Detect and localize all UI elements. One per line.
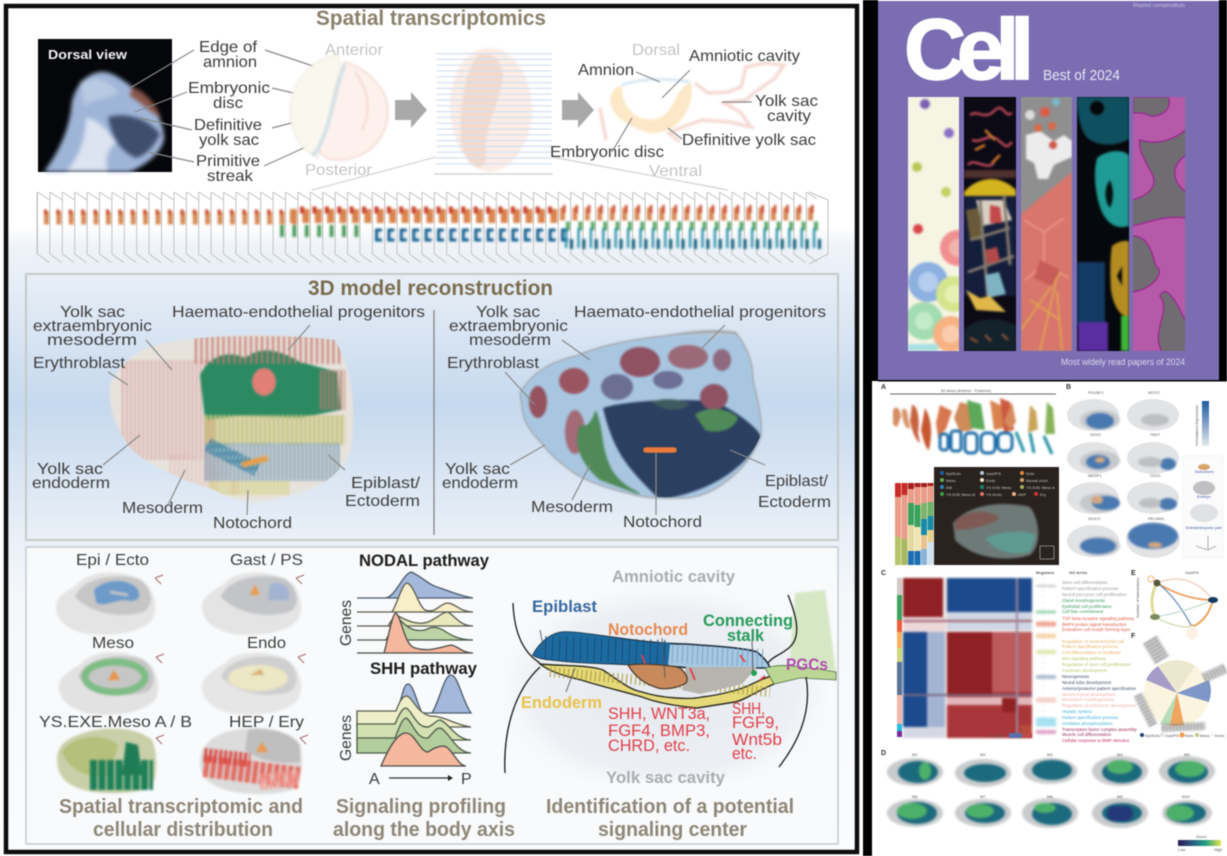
chart: SHH pathway ridgeline: SHH pathway: [370, 660, 478, 678]
diagram: potential signaling center: FGF4, BMP3,: [608, 722, 710, 740]
GO terms list: Oxidative phosphorylation: [1062, 721, 1113, 726]
labels: rendered surface: Mesoderm: [531, 499, 613, 516]
labels: rendered surface: extraembryonic: [449, 318, 568, 335]
diagram: potential signaling center: Endoderm: [521, 694, 602, 712]
cover text: Most widely read papers of 2024: [1061, 357, 1185, 367]
figure panel A: sections, bars and cloud: Noto: [1026, 471, 1035, 476]
embryo labels: amnion: [203, 54, 257, 71]
divider: [433, 310, 435, 535]
GO terms list: [1062, 580, 1138, 743]
diagram: potential signaling center: Wnt5b: [732, 731, 782, 749]
diagram: potential signaling center: stalk: [727, 627, 765, 645]
GO terms list: Mesoderm morphogenesis: [1062, 697, 1115, 702]
figure panel A: sections, bars and cloud: [881, 384, 1059, 565]
arrow: [562, 92, 594, 128]
regulon tick labels: [1036, 578, 1056, 738]
figure panel B: gene expression maps: [1066, 384, 1223, 558]
chart: SHH pathway ridgeline: Genes: [338, 715, 355, 761]
heading: signaling profiling along the body axis: Signaling profiling: [336, 796, 506, 818]
figure panel D: module score maps: M3: [1047, 752, 1053, 757]
labels: spot cloud: Notochord: [213, 515, 292, 532]
figure panel A: sections, bars and cloud: Ery: [1040, 492, 1046, 497]
figure panel A: sections, bars and cloud: YS EXE Meso: [986, 485, 1012, 490]
diagram: embryo sketch with orientation: [290, 42, 388, 179]
map: Endo: [202, 635, 306, 715]
heatmap module colour stripe: [897, 578, 902, 737]
figure panel C: regulon correlation heatmap: [881, 570, 1138, 743]
figure panel D: module score maps: M10: [1182, 794, 1191, 799]
map: Meso: Meso: [92, 635, 134, 652]
diagram: embryo cross section: Definitive yolk sac: [682, 132, 816, 149]
diagram: potential signaling center: Epiblast: [532, 598, 598, 616]
figure panel D: module score maps: M7: [980, 794, 986, 799]
labels: spot cloud: Erythroblast: [33, 355, 126, 372]
chart: NODAL pathway ridgeline: Genes: [338, 600, 355, 646]
GO terms list: Cell fate commitment: [1062, 609, 1104, 614]
heading: spatial transcriptomics: Spatial transcriptomics: [316, 7, 546, 30]
cover text: [904, 2, 1185, 367]
chart: SHH pathway ridgeline: [338, 660, 478, 788]
labels: spot cloud: Mesoderm: [122, 500, 203, 517]
labels: rendered surface: Epiblast/: [765, 473, 829, 490]
figure panel A: sections, bars and cloud: HEP: [1018, 492, 1027, 497]
figure panel D: module score maps: High: [1214, 847, 1222, 852]
panel: signalling analyses: [26, 547, 838, 844]
diagram: potential signaling center: PGCs: [786, 656, 828, 674]
labels: spot cloud: Ectoderm: [345, 493, 420, 510]
embryo labels: yolk sac: [199, 132, 259, 149]
embryo labels: [188, 39, 270, 185]
labels: spot cloud: Haemato-endothelial progenitors: [172, 304, 425, 321]
heatmap cell blocks: [903, 578, 1032, 738]
figure panel B: gene expression maps: SOX2: [1090, 432, 1101, 437]
diagram: potential signaling center: Connecting: [703, 612, 793, 630]
figure panel A: sections, bars and cloud: YS Endo: [986, 492, 1003, 497]
labels: rendered surface: Haemato-endothelial progenitors: [574, 304, 826, 321]
figure panel A: sections, bars and cloud: YS EXE Meso A: [1026, 485, 1055, 490]
diagram: sectioning stack: [434, 48, 553, 174]
map: Epi / Ecto: [56, 552, 163, 635]
map: YS.EXE.Meso A / B: [39, 714, 192, 793]
GO terms list: Transcription factor complex assembly: [1062, 727, 1138, 732]
GO terms list: Regulation of stem cell proliferation: [1062, 662, 1131, 667]
main figure frame: [6, 6, 857, 852]
photo: dorsal view of embryo: Dorsal view: [48, 48, 127, 62]
figure panel D: module score maps: [881, 750, 1222, 852]
figure panel A: sections, bars and cloud: 50 slices (Anterior - Posterior): [941, 388, 992, 393]
figure panel D: module score maps: M8: [1047, 794, 1053, 799]
figure panel B: gene expression maps: Embryo: [1197, 494, 1212, 499]
labels: spot cloud: mesoderm: [47, 332, 137, 349]
diagram: embryo sketch with orientation: Anterior: [325, 42, 384, 59]
leader lines from labels: [130, 50, 358, 166]
figure panel B: gene expression maps: NOTO: [1148, 390, 1159, 395]
figure panel D: module score maps: Score: [1196, 834, 1207, 839]
cover text: Best of 2024: [1043, 68, 1120, 84]
figure panel B: gene expression maps: B: [1066, 384, 1071, 391]
diagram: potential signaling center: Amniotic cavity: [612, 568, 736, 586]
figure panel F: chord diagram: Meso: [1200, 733, 1211, 738]
embryo labels: Definitive: [194, 117, 262, 134]
figure panel F: chord diagram: Endo: [1215, 733, 1225, 738]
figure panel E: interaction network: Number of interactions: [1135, 578, 1140, 618]
arrow: [395, 92, 427, 128]
black separator column: [863, 0, 878, 856]
figure panel A: sections, bars and cloud: Meso: [946, 478, 957, 483]
diagram: potential signaling center: [505, 568, 836, 787]
diagram: embryo cross section: Yolk sac: [755, 93, 818, 110]
GO terms list: Regulation of mesenchymal cell: [1062, 639, 1124, 644]
diagram: embryo cross section: Amnion: [578, 62, 634, 79]
GO terms list: Muscle cell differentiation: [1062, 732, 1112, 737]
heading: 3D model reconstruction: 3D model reconstruction: [308, 277, 553, 300]
map: HEP / Ery: [200, 714, 308, 794]
labels: rendered surface: Yolk sac: [445, 461, 510, 478]
figure panel C: regulon correlation heatmap: GO terms: [1069, 570, 1088, 575]
diagram: potential signaling center: etc.: [732, 745, 757, 763]
zoom lines to section strip: [312, 157, 728, 190]
diagram: embryo cross section: Dorsal: [632, 42, 680, 59]
figure panel A: sections, bars and cloud: Endo: [986, 478, 996, 483]
labels: rendered surface: endoderm: [442, 475, 518, 492]
figure panel B: gene expression maps: Normalized Expression: [1194, 405, 1199, 446]
map: Gast / PS: Gast / PS: [230, 552, 303, 569]
diagram: embryo cross section: Ventral: [649, 163, 702, 180]
diagram: potential signaling center: Notochord: [608, 621, 688, 639]
labels: rendered surface: [442, 304, 831, 531]
embryo labels: Embryonic: [188, 80, 270, 97]
figure panel D: module score maps: M1: [912, 752, 918, 757]
embryo labels: disc: [213, 95, 243, 112]
GO terms list: TGF-beta receptor signaling pathway: [1062, 616, 1135, 621]
diagram: embryo cross section: cavity: [767, 108, 811, 125]
figure panel B: gene expression maps: TBXT: [1150, 432, 1161, 437]
chart: NODAL pathway ridgeline: NODAL pathway: [359, 552, 490, 570]
labels: spot cloud: Yolk sac: [60, 304, 125, 321]
GO terms list: Hepatic system: [1062, 709, 1092, 714]
cover text: Cell: [904, 2, 1034, 98]
cover text: Reprint compendium: [1133, 3, 1185, 9]
diagram: potential signaling center: SHH,: [732, 700, 765, 718]
GO terms list: Cellular response to BMP stimulus: [1062, 738, 1130, 743]
labels: spot cloud: endoderm: [32, 475, 110, 492]
labels: rendered surface: mesoderm: [469, 332, 551, 349]
map: HEP / Ery: HEP / Ery: [229, 714, 304, 731]
figure panel B: gene expression maps: SOX17: [1088, 516, 1102, 521]
labels: rendered surface: Yolk sac: [476, 304, 540, 321]
figure panel B: gene expression maps: CDX1: [1150, 473, 1161, 478]
figure panel A: sections, bars and cloud: A: [881, 384, 886, 391]
figure panel A: sections, bars and cloud: Gast/PS: [986, 471, 1001, 476]
heading: signaling profiling along the body axis: [333, 796, 515, 841]
chart: SHH pathway ridgeline: A: [369, 771, 380, 788]
heading: signaling profiling along the body axis: along the body axis: [333, 819, 515, 841]
figure panel B: gene expression maps: POU5F1: [1088, 390, 1104, 395]
GO terms list: Epithelial cell proliferation: [1062, 604, 1112, 609]
figure panel D: module score maps: M2: [980, 752, 986, 757]
model: spot cloud reconstruction: [110, 335, 353, 502]
cover image: illustrated windows: [963, 96, 1017, 352]
figure panel F: chord diagram: F: [1131, 633, 1136, 640]
chart: NODAL pathway ridgeline: [338, 552, 490, 653]
GO terms list: Anterior/posterior pattern specification: [1062, 686, 1137, 691]
labels: rendered surface: Erythroblast: [447, 355, 540, 372]
cover image: teal organoids: [1076, 96, 1130, 352]
GO terms list: Forebrain development: [1062, 668, 1108, 673]
GO terms list: Neural precursor cell proliferation: [1062, 592, 1127, 597]
GO terms list: Neural tube development: [1062, 680, 1112, 685]
figure panel F: chord diagram: GastPS: [1165, 733, 1179, 738]
embryo labels: Edge of: [199, 39, 258, 56]
journal cover: Cell Best of 2024: [878, 0, 1227, 382]
map: Endo: Endo: [247, 635, 286, 652]
diagram: embryo cross section: Embryonic disc: [550, 144, 664, 161]
figure panel E: interaction network: GastPS: [1185, 570, 1199, 575]
strip of serial tissue sections: [37, 192, 828, 264]
diagram: embryo cross section: [550, 42, 818, 180]
GO terms list: Stem cell differentiation: [1062, 580, 1108, 585]
embryo labels: Primitive: [196, 153, 260, 170]
GO terms list: Pattern specification process: [1062, 586, 1119, 591]
figure panel A: sections, bars and cloud: AM: [946, 485, 952, 490]
cover image: molecule and kidney tissue: [1020, 96, 1072, 352]
embryo labels: streak: [207, 168, 254, 185]
GO terms list: Pattern specification process: [1062, 644, 1119, 649]
figure panel F: chord diagram: [1131, 633, 1226, 738]
map: Gast / PS: [202, 552, 304, 635]
GO terms list: BMP4 protein signal transduction: [1062, 622, 1127, 627]
photo: dorsal view of embryo: [38, 39, 172, 172]
figure panel D: module score maps: M4: [1117, 752, 1123, 757]
map: Epi / Ecto: Epi / Ecto: [76, 552, 149, 569]
GO terms list: Gland morphogenesis: [1062, 598, 1106, 603]
cover image: pink folded tissue: [1132, 96, 1186, 352]
figure panel D: module score maps: M9: [1117, 794, 1123, 799]
heading: spatial transcriptomic and cellular distribution: Spatial transcriptomic and: [59, 796, 303, 818]
GO terms list: Neurogenesis: [1062, 674, 1090, 679]
figure panel D: module score maps: Low: [1178, 847, 1185, 852]
labels: rendered surface: Ectoderm: [758, 494, 831, 511]
figure panel A: sections, bars and cloud: Epi/Ecto: [946, 471, 962, 476]
figure panel D: module score maps: M5: [1184, 752, 1190, 757]
heading: identification of a potential signaling center: signaling center: [598, 819, 747, 841]
figure panel A: sections, bars and cloud: Neural crest: [1026, 478, 1048, 483]
cover image: blood cells: [907, 96, 960, 352]
heading: spatial transcriptomic and cellular distribution: [59, 796, 303, 841]
figure panel A: sections, bars and cloud: YS EXE Meso B: [946, 492, 975, 497]
labels: spot cloud: [32, 304, 425, 532]
chart: SHH pathway ridgeline: P: [461, 771, 472, 788]
map: YS.EXE.Meso A / B: YS.EXE.Meso A / B: [39, 714, 192, 731]
figure panel B: gene expression maps: Notochord: [1195, 469, 1213, 474]
diagram: potential signaling center: SHH, WNT3a,: [608, 705, 710, 723]
GO terms list: Mesenchymal development: [1062, 692, 1116, 697]
heading: identification of a potential signaling center: Identification of a potential: [546, 796, 794, 818]
GO terms list: Wnt signaling pathway: [1062, 656, 1107, 661]
heading: spatial transcriptomic and cellular distribution: cellular distribution: [93, 819, 273, 841]
diagram: embryo sketch with orientation: Posterior: [305, 162, 373, 179]
panel: 3D model reconstruction: [26, 274, 838, 540]
figure panel C: regulon correlation heatmap: Regulons: [1036, 570, 1055, 575]
figure panel B: gene expression maps: Extraembryonic part: [1186, 525, 1223, 530]
figure panel D: module score maps: D: [881, 750, 886, 757]
labels: spot cloud: Yolk sac: [37, 461, 103, 478]
GO terms list: Cell differentiation in hindbrain: [1062, 650, 1122, 655]
figure panel C: regulon correlation heatmap: C: [881, 570, 886, 577]
heading: identification of a potential signaling center: [546, 796, 794, 841]
figure panel F: chord diagram: Epi/Ecto: [1145, 733, 1161, 738]
labels: spot cloud: Epiblast/: [351, 475, 421, 492]
labels: spot cloud: extraembryonic: [33, 318, 152, 335]
diagram: potential signaling center: FGF9,: [732, 714, 779, 732]
map: Meso: [59, 635, 164, 715]
figure panel B: gene expression maps: MESP1: [1088, 473, 1102, 478]
figure panel E: interaction network: E: [1131, 570, 1136, 577]
GO terms list: Regulation of embryonic development: [1062, 703, 1136, 708]
GO terms list: Pattern specification process: [1062, 715, 1119, 720]
figure panel D: module score maps: M6: [912, 794, 918, 799]
diagram: embryo cross section: Amniotic cavity: [689, 48, 800, 65]
figure panel B: gene expression maps: PECAM1: [1148, 516, 1165, 521]
GO terms list: Endoderm cell morph forming layer: [1062, 627, 1131, 632]
figure panel F: chord diagram: Noto: [1185, 733, 1194, 738]
diagram: potential signaling center: Yolk sac cavity: [606, 769, 726, 787]
figure panel C: regulon correlation heatmap: Z-score: [990, 733, 1004, 738]
diagram: potential signaling center: CHRD, etc.: [608, 737, 690, 755]
figure panel E: interaction network: [1131, 570, 1218, 640]
labels: rendered surface: Notochord: [623, 514, 702, 531]
model: rendered surface reconstruction: [515, 332, 765, 505]
